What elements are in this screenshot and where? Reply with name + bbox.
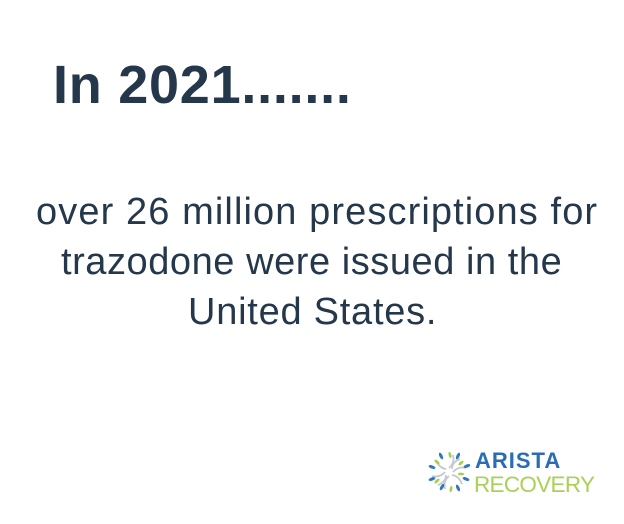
logo text: Recovery: RECOVERY [474,472,594,497]
body text: trazodone were issued in the [61,241,562,283]
title: In 2021....... [53,55,352,115]
body text: over 26 million prescriptions for [36,191,598,233]
body text [36,191,598,333]
logo text: Arista: ARISTA [475,448,561,473]
icon: leaf burst [428,452,470,492]
logo: Arista Recovery [428,448,594,497]
body text: United States. [188,291,437,333]
